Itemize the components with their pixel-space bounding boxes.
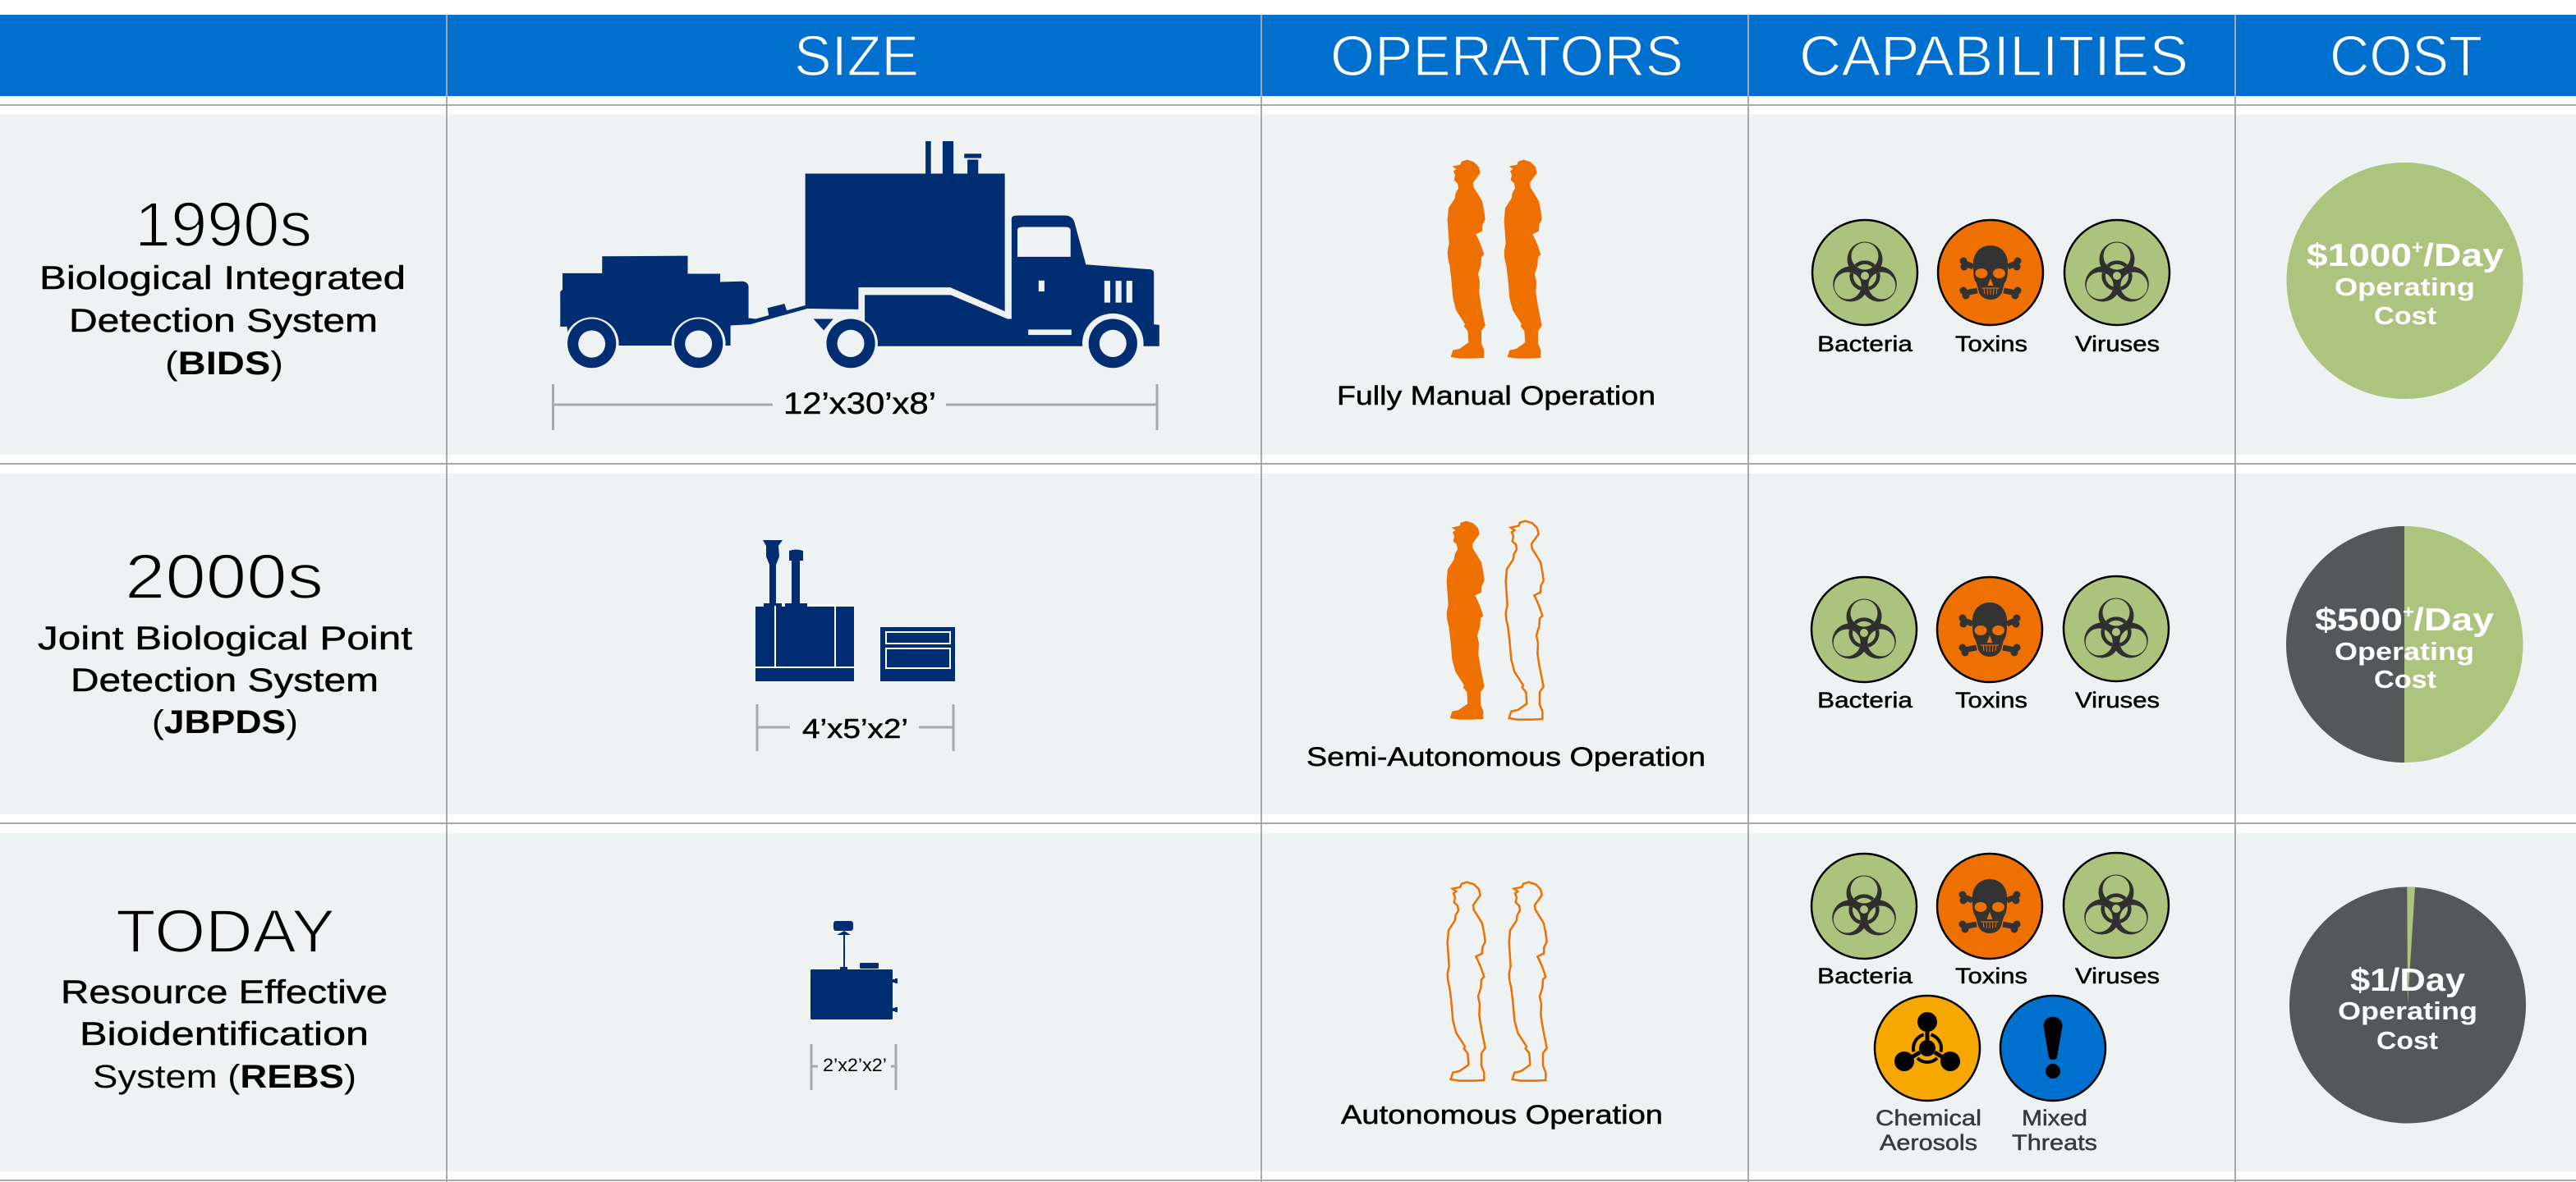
- icon: JBPDS units: [755, 540, 955, 681]
- right stem and head: [789, 550, 803, 605]
- cost text: +: [2403, 602, 2414, 622]
- label viruses: Viruses: [2075, 332, 2160, 356]
- sensor head: [833, 921, 853, 931]
- icon: operator solid: [1504, 160, 1542, 359]
- chart: cost pie today: [2289, 886, 2526, 1123]
- icon: bacteria: [1811, 577, 1917, 682]
- cost text: +: [2412, 237, 2423, 258]
- icon: viruses: [2064, 220, 2170, 325]
- panel: header bar: [0, 15, 2576, 96]
- cost text: $1/Day: [2350, 963, 2465, 998]
- mast: [843, 933, 845, 969]
- label mixed threats: Threats: [2012, 1130, 2097, 1155]
- capabilities row 2000s: [1811, 576, 2169, 712]
- system name line 1: Biological Integrated: [39, 260, 406, 296]
- cost text: [2338, 963, 2477, 1055]
- cost text: Operating: [2338, 996, 2477, 1025]
- dimension: 2x2x2: [811, 1044, 896, 1090]
- label: Fully Manual Operation: [1337, 381, 1655, 410]
- cost text: Operating: [2335, 637, 2474, 666]
- side nubs: [893, 978, 898, 1012]
- capabilities row today: [1811, 853, 2169, 1155]
- cost text: /Day: [2413, 602, 2494, 638]
- stack cap: [964, 153, 981, 158]
- mast collar: [840, 967, 847, 970]
- acronym JBPDS: (JBPDS ): [152, 704, 298, 740]
- icon: operator outline: [1448, 882, 1485, 1081]
- cost text: $500: [2315, 602, 2403, 638]
- cost text: /Day: [2423, 238, 2504, 273]
- system name line 3: System ( REBS ): [93, 1059, 356, 1095]
- heading: operators: OPERATORS: [1330, 24, 1683, 88]
- icon: toxins: [1937, 854, 2042, 959]
- operators: semi-autonomous: [1306, 521, 1706, 772]
- main unit: [755, 607, 854, 681]
- label mixed threats: [2012, 1106, 2097, 1155]
- cost text: Cost: [2376, 1026, 2438, 1055]
- icon: operator outline: [1509, 882, 1547, 1081]
- label mixed threats: Mixed: [2022, 1106, 2087, 1130]
- label viruses: Viruses: [2075, 688, 2160, 712]
- system name line 2: Detection System: [69, 303, 378, 339]
- wheels: [567, 319, 1137, 368]
- icon: bacteria: [1812, 220, 1917, 325]
- heading: size: SIZE: [794, 24, 919, 88]
- icon: REBS unit: [810, 921, 898, 1019]
- era label 2000s: 2000s: [125, 542, 324, 612]
- icon: operator solid: [1448, 160, 1485, 359]
- cab window: [1017, 227, 1071, 257]
- main box: [810, 969, 893, 1019]
- label toxins: Toxins: [1955, 332, 2027, 356]
- heading: cost: COST: [2330, 24, 2482, 88]
- icon: operator solid: [1447, 521, 1485, 720]
- label bacteria: Bacteria: [1817, 688, 1913, 712]
- left stem and head: [763, 540, 783, 605]
- operators: fully manual: [1337, 160, 1655, 410]
- secondary unit panels: [886, 632, 950, 668]
- text block: 2000s system: [38, 542, 412, 740]
- icon: truck and trailer: [560, 141, 1159, 373]
- label chemical aerosols: Aerosols: [1880, 1130, 1977, 1155]
- label chemical aerosols: Chemical: [1876, 1106, 1981, 1130]
- sensor mount: [837, 931, 851, 935]
- system name line 2: Detection System: [71, 662, 379, 699]
- hitch box: [768, 304, 787, 315]
- dimension: 12x30x8: 12’x30’x8’: [783, 387, 936, 420]
- capabilities row 1990s: [1812, 220, 2170, 356]
- cost text: $1000: [2307, 238, 2412, 273]
- label chemical aerosols: [1876, 1106, 1981, 1155]
- label: Semi-Autonomous Operation: [1306, 742, 1706, 772]
- system name line 1: Resource Effective: [61, 974, 388, 1010]
- system name line 1: Joint Biological Point: [38, 621, 412, 657]
- system name line 2: Bioidentification: [80, 1016, 369, 1052]
- icon: viruses: [2064, 853, 2169, 958]
- dimension: 4x5x2: [757, 704, 953, 751]
- label toxins: Toxins: [1955, 688, 2027, 712]
- chart: cost pie 2000s: [2286, 526, 2523, 763]
- cost text: Cost: [2374, 301, 2436, 330]
- top block: [860, 963, 879, 969]
- dimension: 2x2x2: 2’x2’x2’: [823, 1055, 887, 1075]
- era label today: TODAY: [116, 897, 335, 965]
- panel: row background 2000s: [0, 474, 2576, 814]
- label toxins: Toxins: [1955, 964, 2027, 988]
- label bacteria: Bacteria: [1817, 964, 1913, 988]
- icon: chemical aerosols: [1875, 996, 1980, 1101]
- unit white seams: [755, 605, 854, 667]
- cost text: Cost: [2374, 665, 2436, 694]
- text block: today system: [61, 897, 388, 1095]
- operators: autonomous: [1341, 882, 1663, 1129]
- dimension: 12x30x8: [553, 384, 1157, 430]
- icon: bacteria: [1811, 854, 1917, 959]
- heading: capabilities: CAPABILITIES: [1799, 24, 2188, 88]
- dimension: 4x5x2: 4’x5’x2’: [802, 713, 908, 744]
- text block: 1990s system: [39, 190, 406, 382]
- cost text: Operating: [2335, 273, 2475, 301]
- icon: viruses: [2064, 576, 2169, 681]
- icon: toxins: [1937, 577, 2042, 682]
- era label 1990s: 1990s: [135, 190, 312, 260]
- cost text: [2307, 237, 2504, 330]
- label viruses: Viruses: [2075, 964, 2160, 988]
- cab details: [565, 281, 1144, 373]
- trailer body and hitch: [560, 256, 806, 346]
- chart: cost pie 1990s: [2286, 163, 2523, 399]
- panel: row background today: [0, 833, 2576, 1171]
- icon: operator outline: [1506, 521, 1544, 720]
- wheel stop: [814, 319, 833, 330]
- secondary unit: [880, 627, 955, 681]
- truck cab and chassis: [865, 216, 1159, 346]
- collars: [764, 603, 782, 607]
- icon: toxins: [1938, 220, 2043, 325]
- label bacteria: Bacteria: [1817, 332, 1913, 356]
- cargo box with stacks: [806, 141, 1005, 311]
- icon: mixed threats: [2000, 996, 2105, 1101]
- label: Autonomous Operation: [1341, 1100, 1663, 1129]
- cost text: [2315, 602, 2494, 694]
- panel: row background 1990s: [0, 114, 2576, 455]
- acronym BIDS: (BIDS ): [165, 346, 283, 382]
